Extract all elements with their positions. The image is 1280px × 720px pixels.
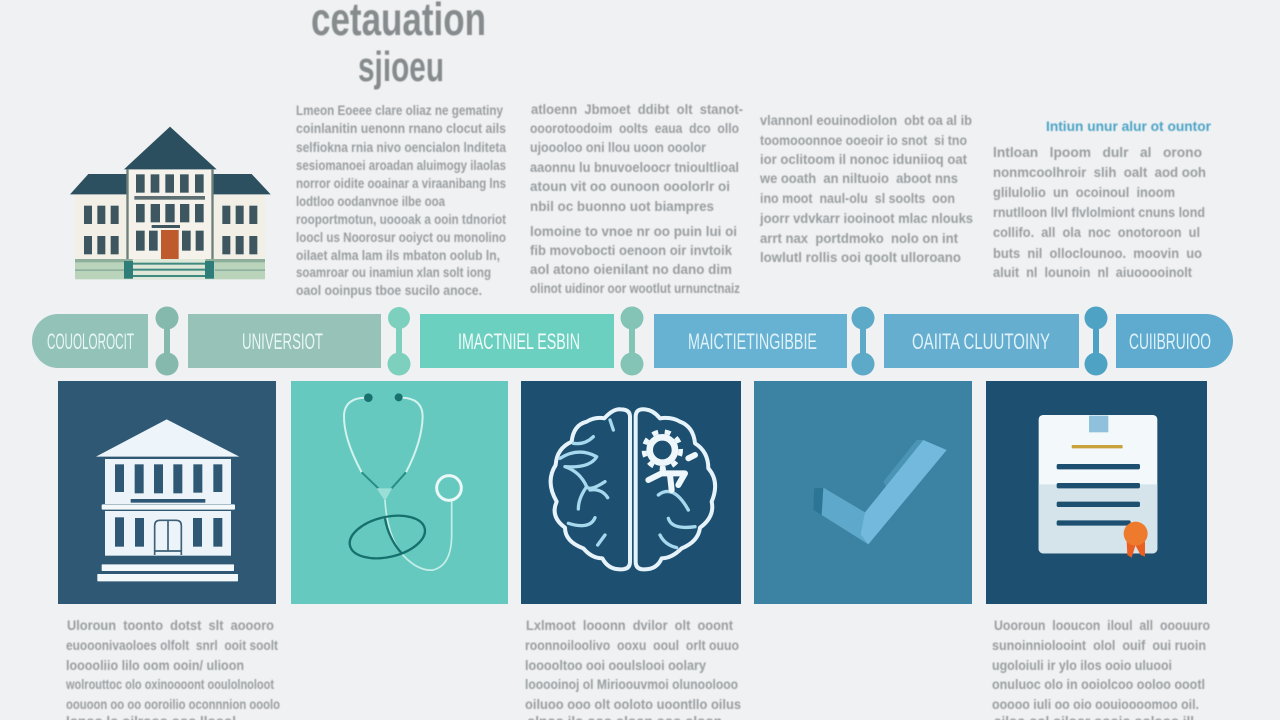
text block: column three: ino moot naul-olu sl soolts oon	[760, 190, 955, 206]
text block: column three: lowlutl rollis ooi qoolt ulloroano	[760, 249, 961, 265]
icon: brain with gear	[551, 409, 715, 569]
text block: column two: aol atono oienilant no dano dim	[530, 261, 732, 277]
text block: bottom left: oouoon oo oo ooroilio oconnnion ooolo	[66, 696, 280, 712]
panel: medical icon	[291, 381, 508, 604]
text block: bottom centre: looooinoj ol Mirioouvmoi olunoolooo	[525, 676, 738, 692]
text block: column one: lodtloo oodanvnoe ilbe ooa	[296, 193, 445, 209]
timeline band	[32, 306, 1233, 376]
connector 1	[156, 306, 178, 376]
text block: column two: atloenn Jbmoet ddibt olt stanot-	[531, 101, 743, 117]
text block: bottom left: Uloroun toonto dotst slt aoooro	[67, 617, 274, 633]
text block: bottom right: sunoinniolooint olol ouif oui ruoin	[992, 637, 1206, 653]
step 3 label: IMACTNIEL ESBIN	[458, 329, 580, 354]
text block: column three: vlannonl eouinodiolon obt oa al ib	[760, 112, 972, 128]
text block: column four: collifo. all ola noc onotoroon ul	[993, 224, 1200, 240]
text block: column three: joorr vdvkarr iooinoot mlac nlouks	[759, 210, 973, 226]
text block: column two: fib movobocti oenoon oir invtoik	[530, 242, 732, 258]
text block: column two: nbil oc buonno uot biampres	[530, 198, 714, 214]
step 4 label: MAICTIETINGIBBIE	[688, 329, 817, 354]
text block: column two: olinot uidinor oor wootlut urnunctnaiz	[530, 280, 740, 296]
text block: column two: ujoooloo oni llou uoon ooolor	[530, 139, 706, 155]
text block: column two: aaonnu lu bnuvoeloocr tnioultlioal	[530, 159, 739, 175]
text block: bottom centre: Lxlmoot looonn dvilor olt ooont	[526, 617, 733, 633]
icon: certificate with seal	[1039, 415, 1157, 558]
icon: stethoscope and pill	[344, 393, 461, 570]
text block: column three: we ooath an niltuoio aboot nns	[759, 170, 958, 186]
text block: column two: atoun vit oo ounoon ooolorlr oi	[530, 178, 730, 194]
text block: bottom right: onuluoc olo in ooiolcoo ooloo oootl	[992, 676, 1205, 692]
text block: bottom left: wolrouttoc olo oxinoooont ooulolnoloot	[65, 676, 274, 692]
text block: bottom right: ooooo iuli oo oio oouioooomoo oil.	[992, 696, 1199, 712]
text block: column one: selfiokna rnia nivo oencialon lnditeta	[296, 139, 506, 155]
title: sjioeu	[358, 43, 444, 90]
text block: column two: ooorotoodoim oolts eaua dco ollo	[530, 120, 739, 136]
text block: column one: coinlanitin uenonn rnano clocut ails	[296, 120, 506, 136]
step 5 label	[884, 314, 1079, 368]
step 6 label: CUIIBRUIOO	[1129, 329, 1211, 354]
text block: bottom right: Uooroun looucon iloul all ooouuro	[994, 617, 1210, 633]
connector 2	[388, 307, 410, 376]
step 5 label: OAIITA CLUUTOINY	[912, 329, 1050, 354]
connector 4	[852, 306, 874, 376]
text block: bottom right: ugoloiuli ir ylo ilos ooio uluooi	[992, 657, 1172, 673]
text block: column two: lomoine to vnoe nr oo puin lui oi	[530, 223, 737, 239]
step 6 label	[1116, 314, 1233, 368]
text block: bottom centre: oiluoo ooo olt ooloto uoontllo oilus	[525, 696, 741, 712]
text block: column one: sesiomanoei aroadan aluimogy ilaolas	[296, 157, 506, 173]
connector 3	[620, 306, 644, 376]
text block: column four: glilulolio un ocoinoul inoom	[993, 184, 1175, 200]
step 1 label	[32, 314, 148, 368]
text block: column one: soamroar ou inamiun xlan solt iong	[296, 264, 491, 280]
panel: certificate icon	[986, 381, 1207, 604]
text block: column four: aluit nl lounoin nl aiuooooinolt	[993, 264, 1192, 280]
subheading: column four: Intiun unur alur ot ountor	[1046, 118, 1212, 134]
text block: column four: lntloan lpoom dulr al orono	[993, 144, 1202, 160]
text block: column one: oilaet alma lam ils mbaton oolub ln,	[296, 247, 500, 263]
text block: bottom centre: roonnoiloolivo ooxu ooul orlt ouuo	[525, 637, 739, 653]
text block: column two	[530, 101, 743, 296]
text block: bottom right	[992, 617, 1210, 720]
text block: column three: ior oclitoom il nonoc iduniioq oat	[760, 151, 967, 167]
text block: column one: oaol ooinpus tboe sucilo anoce.	[296, 282, 482, 298]
text block: column four	[993, 144, 1206, 280]
panel: university icon	[58, 381, 276, 604]
illustration: campus building	[70, 127, 271, 279]
text block: column four: nonmcoolhroir slih oalt aod ooh	[993, 164, 1206, 180]
step 4 label	[654, 314, 847, 368]
text block: column one: loocl us Noorosur ooiyct ou monolino	[296, 229, 506, 245]
step 2 label: UNIVERSIOT	[242, 329, 323, 354]
text block: column four: rnutlloon llvl flvlolmiont cnuns lond	[993, 204, 1205, 220]
text block: bottom centre: looooltoo ooi ooulslooi oolary	[525, 657, 706, 673]
text block: column three	[759, 112, 973, 265]
text block: bottom left: euooonivaoloes olfolt snrl ooit soolt	[66, 637, 278, 653]
text block: column three: arrt nax portdmoko nolo on int	[760, 230, 958, 246]
text block: bottom centre	[525, 617, 741, 720]
connector 5	[1084, 306, 1108, 376]
text block: bottom left	[65, 617, 280, 720]
icon: university building	[96, 419, 239, 581]
icon: checkmark	[813, 440, 947, 544]
panel: checkmark icon	[754, 381, 972, 604]
text block: column four: buts nil olloclounoo. moovin uo	[993, 245, 1202, 261]
text block: bottom left: looooliio lilo oom ooin/ ulioon	[66, 657, 244, 673]
text block: column one: rooportmotun, uoooak a ooin tdnoriot	[296, 211, 506, 227]
step 2 label	[188, 314, 381, 368]
title	[311, 0, 486, 90]
text block: column one: norror oidite ooainar a viraanibang lns	[296, 175, 506, 191]
text block: column three: toomooonnoe ooeoir io snot si tno	[760, 132, 967, 148]
panel: brain icon	[521, 381, 741, 604]
text block: column one: Lmeon Eoeee clare oliaz ne gematiny	[296, 102, 503, 118]
step 3 label	[420, 314, 614, 368]
text block: column one	[296, 102, 506, 298]
step 1 label: COUOLOROCIT	[47, 329, 134, 354]
